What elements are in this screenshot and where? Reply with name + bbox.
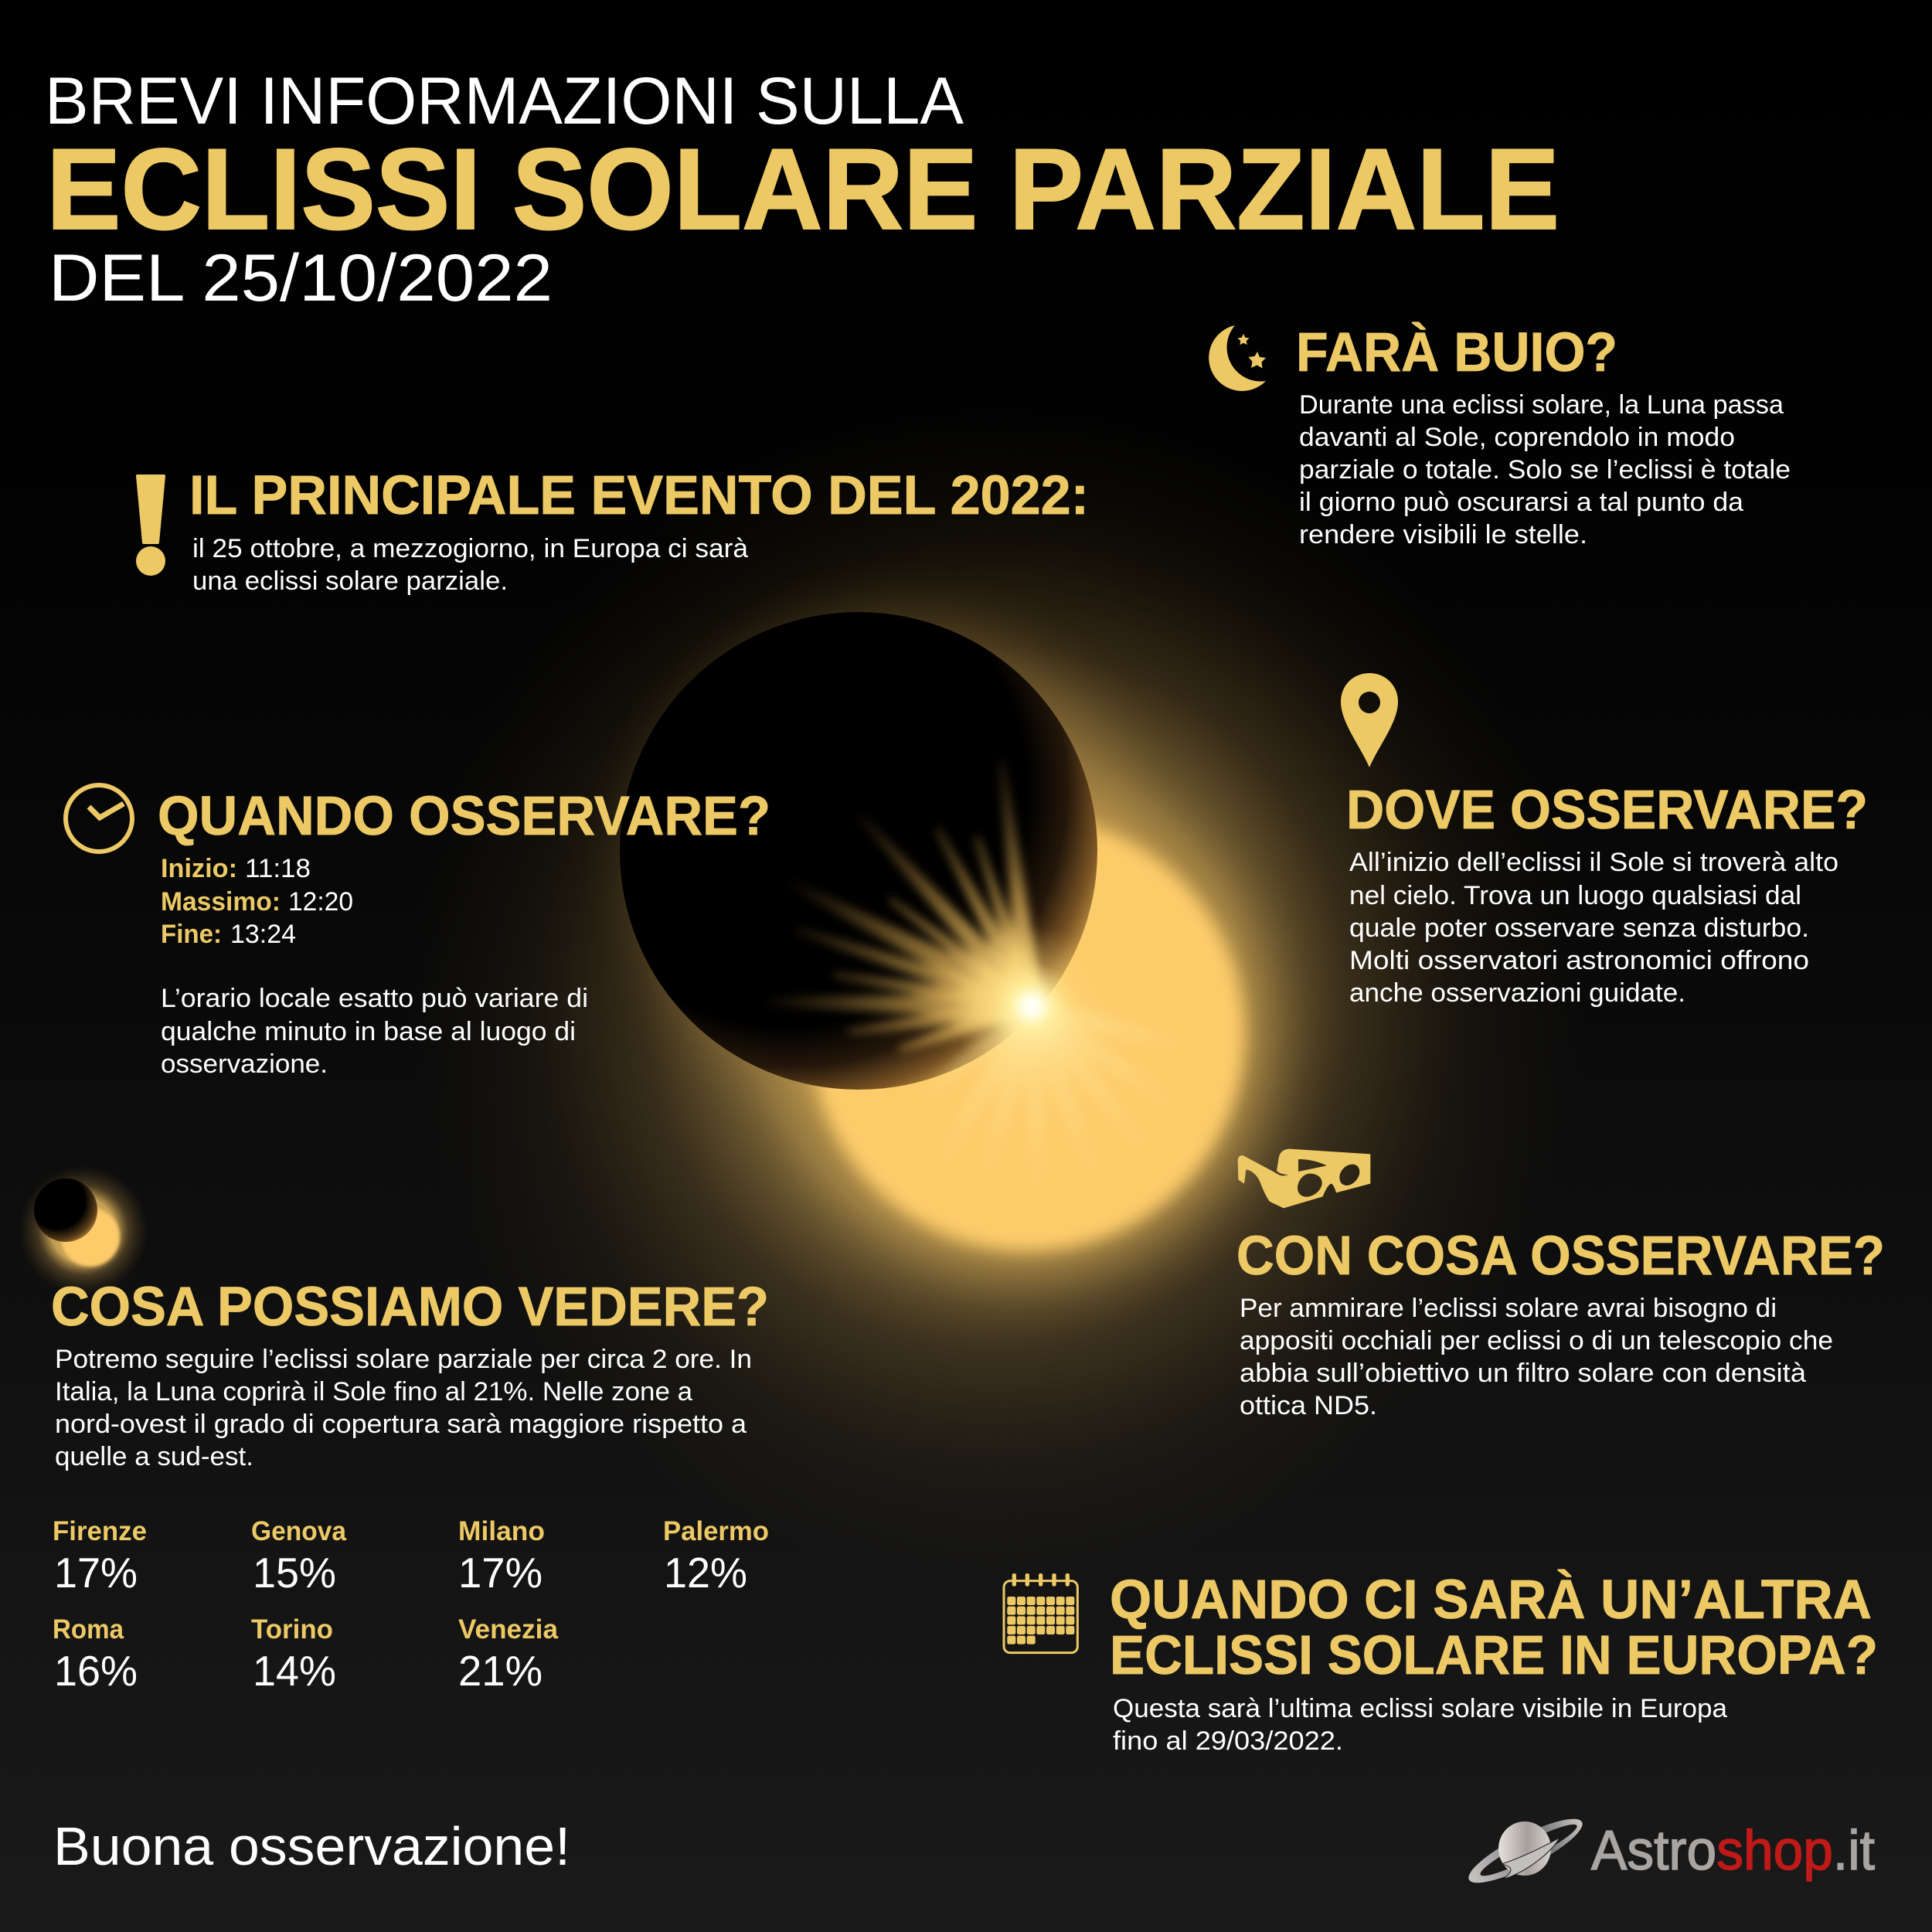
- times: 13:24: [230, 920, 296, 949]
- text block: appositi occhiali per eclissi o di un telescopio che: [1240, 1326, 1833, 1355]
- heading: ECLISSI SOLARE IN EUROPA?: [1110, 1625, 1878, 1686]
- text block: abbia sull’obiettivo un filtro solare con densità: [1240, 1359, 1806, 1388]
- text block: Molti osservatori astronomici offrono: [1349, 946, 1809, 975]
- city coverage table: Firenze: [53, 1516, 147, 1546]
- wordmark: Astroshop.it: [1591, 1820, 1875, 1882]
- times: Massimo:: [161, 887, 281, 917]
- icon: saturn: [1462, 1808, 1589, 1893]
- heading: QUANDO OSSERVARE?: [158, 786, 770, 847]
- heading: QUANDO CI SARÀ UN’ALTRA: [1110, 1570, 1872, 1631]
- city coverage table: [53, 1516, 769, 1695]
- text block: qualche minuto in base al luogo di: [161, 1017, 576, 1046]
- text block: quelle a sud-est.: [55, 1442, 253, 1471]
- text block: fino al 29/03/2022.: [1113, 1726, 1343, 1756]
- city coverage table: 15%: [253, 1549, 336, 1597]
- heading: FARÀ BUIO?: [1296, 322, 1617, 383]
- panel: cosa possiamo vedere: [19, 1165, 769, 1695]
- panel: con cosa osservare: [1236, 1149, 1885, 1420]
- text block: [161, 984, 588, 1079]
- text block: una eclissi solare parziale.: [192, 566, 508, 596]
- text block: Durante una eclissi solare, la Luna passa: [1299, 390, 1784, 420]
- text block: quale poter osservare senza disturbo.: [1349, 913, 1809, 943]
- city coverage table: Genova: [251, 1516, 347, 1546]
- icon: small eclipse: [19, 1165, 148, 1295]
- icon: moon and stars: [1209, 325, 1266, 391]
- logo: Astroshop.it: [1462, 1808, 1875, 1893]
- text block: Per ammirare l’eclissi solare avrai bisogno di: [1240, 1294, 1777, 1323]
- city coverage table: Palermo: [663, 1516, 769, 1546]
- text block: osservazione.: [161, 1049, 328, 1079]
- text block: [1299, 390, 1791, 549]
- closing line: Buona osservazione!: [53, 1816, 570, 1876]
- city coverage table: 17%: [458, 1549, 543, 1597]
- text block: [1113, 1694, 1727, 1756]
- title: ECLISSI SOLARE PARZIALE: [46, 124, 1560, 253]
- text block: il giorno può oscurarsi a tal punto da: [1299, 488, 1743, 517]
- text block: il 25 ottobre, a mezzogiorno, in Europa ci sarà: [192, 534, 748, 563]
- icon: location pin: [1341, 673, 1398, 767]
- text block: nord-ovest il grado di copertura sarà maggiore rispetto a: [55, 1410, 747, 1439]
- panel: fara buio: [1209, 322, 1791, 549]
- text block: ottica ND5.: [1240, 1391, 1377, 1420]
- title: [45, 64, 1560, 315]
- icon: eclipse glasses: [1238, 1149, 1370, 1208]
- icon: exclamation mark: [136, 476, 165, 576]
- times: Fine:: [161, 920, 222, 949]
- heading: [1110, 1570, 1878, 1686]
- text block: davanti al Sole, coprendolo in modo: [1299, 423, 1735, 452]
- text block: rendere visibili le stelle.: [1299, 520, 1587, 549]
- panel: dove osservare: [1341, 673, 1868, 1008]
- text block: Potremo seguire l’eclissi solare parziale per circa 2 ore. In: [55, 1345, 752, 1374]
- text block: parziale o totale. Solo se l’eclissi è totale: [1299, 455, 1791, 485]
- city coverage table: 14%: [253, 1647, 336, 1695]
- text block: L’orario locale esatto può variare di: [161, 984, 588, 1013]
- times: Inizio:: [161, 854, 237, 883]
- text block: Italia, la Luna coprirà il Sole fino al 21%. Nelle zone a: [55, 1377, 692, 1406]
- times: 12:20: [288, 887, 353, 917]
- panel: prossima eclissi: [1004, 1570, 1878, 1756]
- city coverage table: 21%: [458, 1647, 543, 1695]
- city coverage table: 17%: [54, 1549, 138, 1597]
- heading: COSA POSSIAMO VEDERE?: [51, 1277, 769, 1338]
- text block: [1240, 1294, 1833, 1420]
- city coverage table: 16%: [54, 1647, 138, 1695]
- panel: quando osservare: [66, 785, 770, 1079]
- text block: nel cielo. Trova un luogo qualsiasi dal: [1349, 881, 1801, 910]
- heading: DOVE OSSERVARE?: [1346, 780, 1868, 841]
- title: DEL 25/10/2022: [49, 241, 553, 315]
- panel: principale evento: [136, 465, 1089, 596]
- text block: [1349, 848, 1838, 1008]
- icon: calendar: [1004, 1573, 1077, 1653]
- text block: anche osservazioni guidate.: [1349, 978, 1685, 1008]
- text block: [192, 534, 748, 596]
- text block: [55, 1345, 752, 1471]
- text block: All’inizio dell’eclissi il Sole si troverà alto: [1349, 848, 1838, 877]
- city coverage table: Torino: [251, 1614, 333, 1645]
- central eclipse illustration: [493, 490, 1500, 1496]
- city coverage table: Roma: [53, 1614, 124, 1645]
- heading: IL PRINCIPALE EVENTO DEL 2022:: [189, 465, 1089, 526]
- heading: CON COSA OSSERVARE?: [1236, 1226, 1885, 1287]
- city coverage table: Venezia: [458, 1614, 559, 1645]
- times: 11:18: [245, 854, 311, 883]
- city coverage table: 12%: [664, 1549, 747, 1597]
- text block: Questa sarà l’ultima eclissi solare visibile in Europa: [1113, 1694, 1727, 1723]
- icon: clock: [66, 785, 132, 852]
- city coverage table: Milano: [458, 1516, 545, 1546]
- title: BREVI INFORMAZIONI SULLA: [45, 64, 964, 138]
- times: [161, 854, 353, 949]
